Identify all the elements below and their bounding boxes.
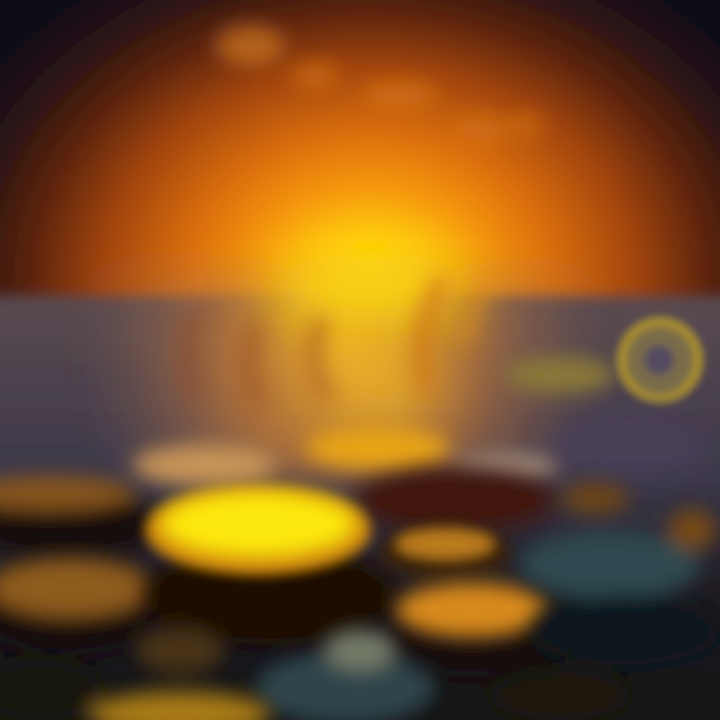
central orange reflection	[40, 252, 660, 480]
bowl: pale teal bottom	[255, 630, 435, 720]
lower hazy water band	[0, 296, 720, 720]
flowing wisps	[188, 270, 495, 400]
bowl: lower amber	[375, 583, 575, 677]
bowl: left upper	[0, 476, 165, 559]
right side ring icon	[505, 322, 698, 398]
bowl: central yellow	[145, 486, 395, 645]
bowl: bottom amber	[0, 626, 630, 720]
bowl: teal right	[520, 483, 720, 665]
bowl: back right dark	[355, 468, 555, 532]
bowl: small amber middle	[379, 524, 511, 580]
smoke plume at top	[216, 25, 543, 146]
back bowl glow rims	[133, 428, 557, 485]
right side violet haze	[550, 417, 710, 473]
bowl: left lower	[0, 555, 170, 655]
